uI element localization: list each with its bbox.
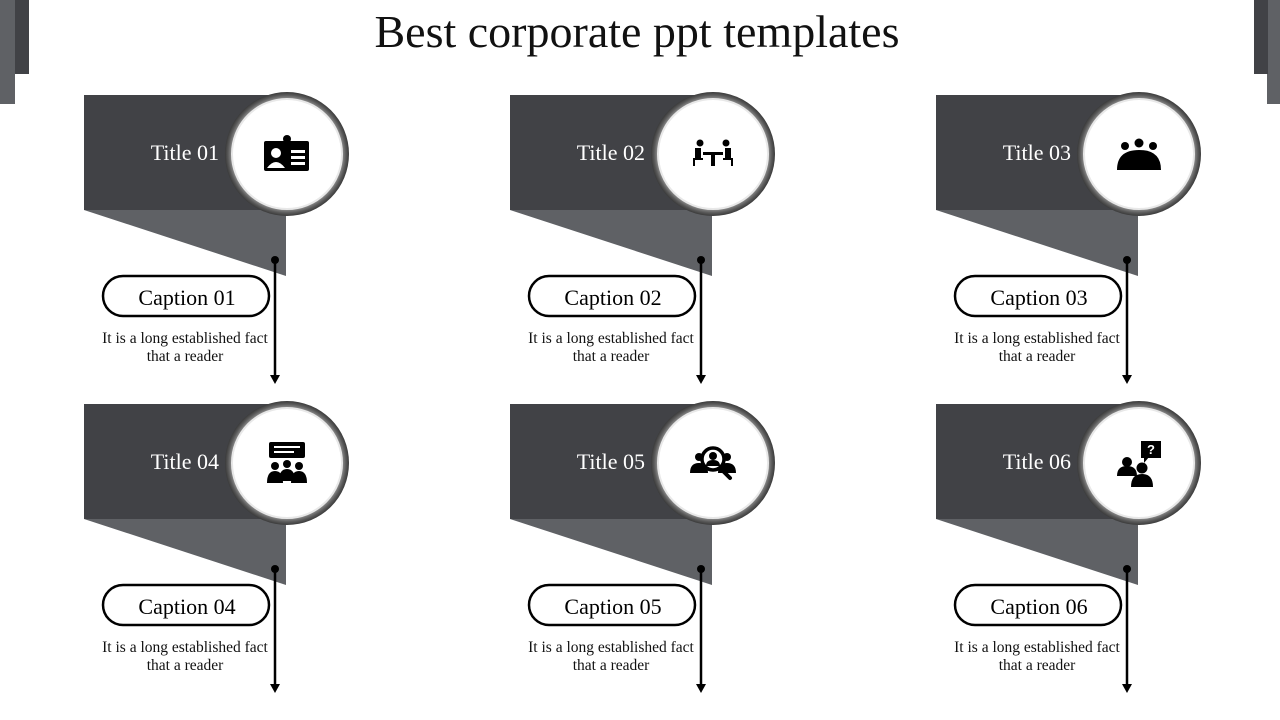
heading: Title 05: Title 05 (577, 449, 645, 474)
caption 04: Caption 04 (138, 594, 236, 619)
icon: search people (690, 448, 736, 478)
icon: presentation (267, 442, 307, 483)
icon: id card (264, 135, 309, 171)
panel: 06 (936, 401, 1201, 693)
icon: group (1117, 138, 1161, 170)
icon: question people (1117, 441, 1161, 487)
panel: 05 (510, 401, 775, 693)
heading: Title 02: Title 02 (577, 140, 645, 165)
panel: 01 (84, 92, 349, 384)
caption 03: Caption 03 (990, 285, 1088, 310)
heading: Title 06: Title 06 (1003, 449, 1071, 474)
corner decoration left (0, 0, 29, 104)
heading: Title 03: Title 03 (1003, 140, 1071, 165)
corner decoration right (1254, 0, 1280, 104)
panel: 04 (84, 401, 349, 693)
caption 06: Caption 06 (990, 594, 1088, 619)
panel: 03 (936, 92, 1201, 384)
icon: meeting (693, 140, 733, 166)
icon: question people: ? (1147, 442, 1155, 457)
caption 01: Caption 01 (138, 285, 236, 310)
title: Best corporate ppt templates (374, 6, 900, 57)
caption 02: Caption 02 (564, 285, 662, 310)
caption 05: Caption 05 (564, 594, 662, 619)
panel: 02 (510, 92, 775, 384)
heading: Title 04: Title 04 (151, 449, 219, 474)
heading: Title 01: Title 01 (151, 140, 219, 165)
